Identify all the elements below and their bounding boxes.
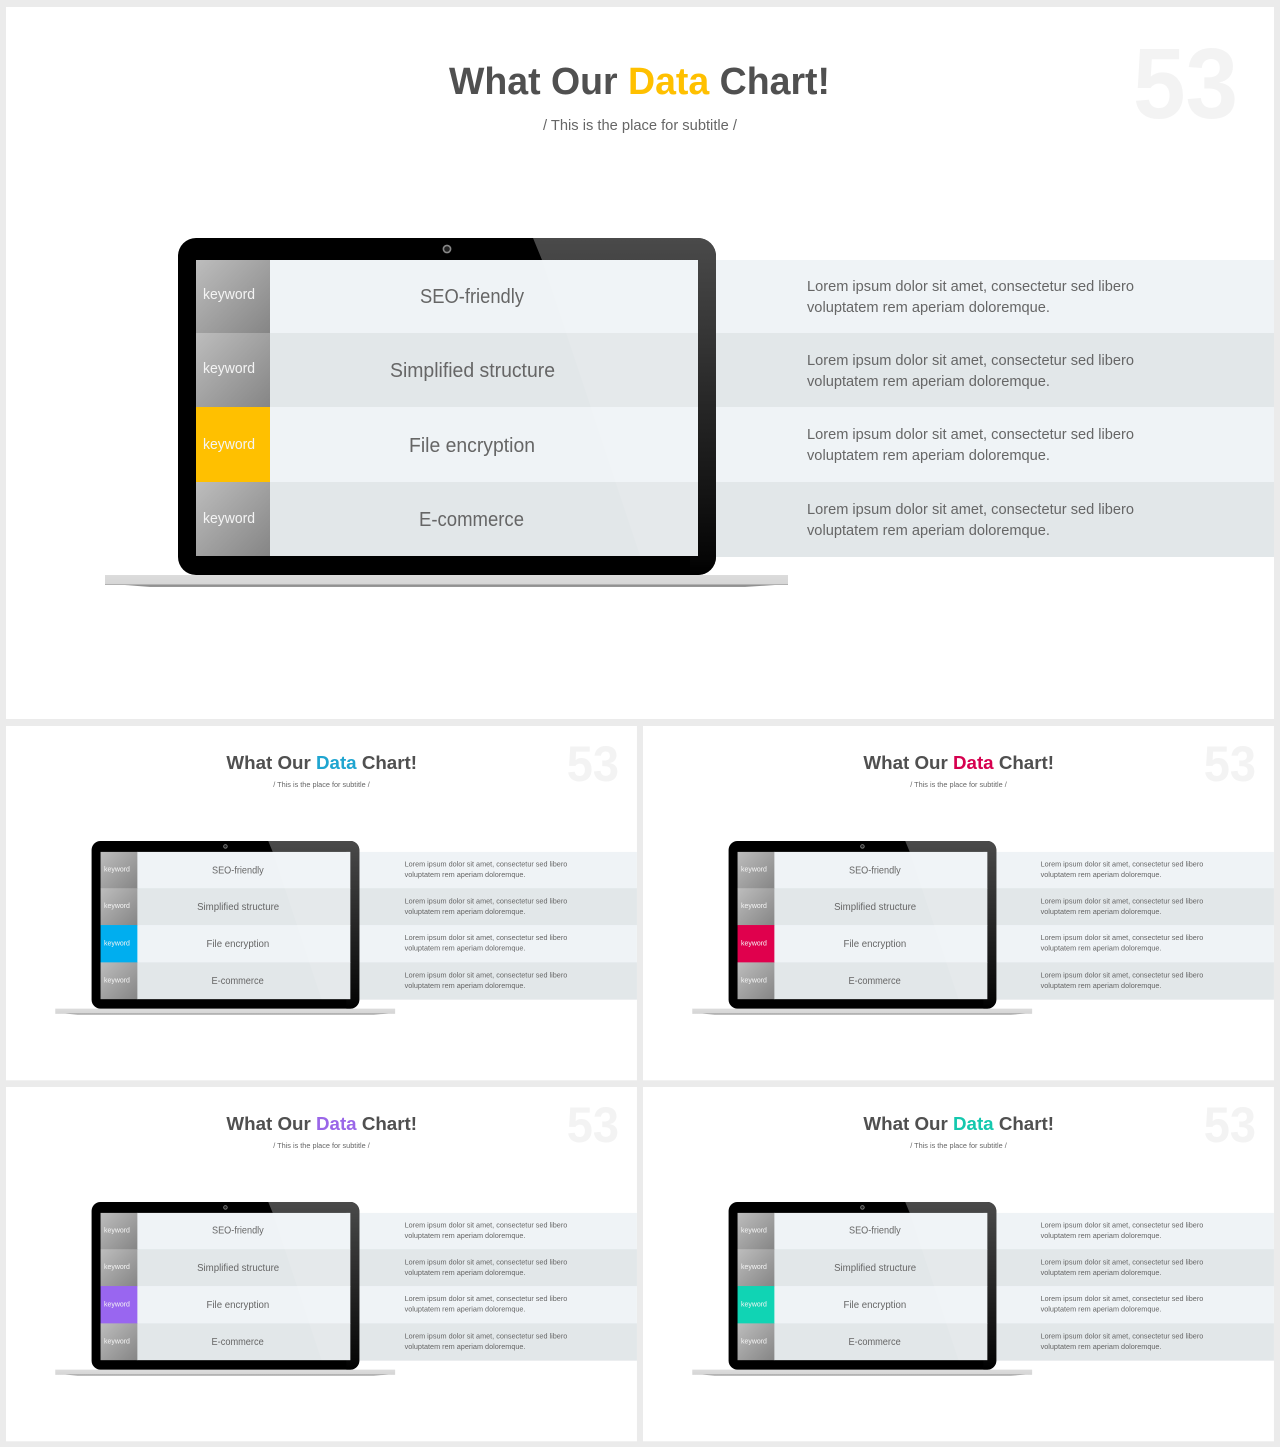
description bands	[716, 260, 1274, 557]
subtitle: / This is the place for subtitle /	[543, 117, 738, 134]
description bands: voluptatem rem aperiam doloremque.	[1041, 944, 1161, 953]
description bands: voluptatem rem aperiam doloremque.	[1041, 981, 1161, 990]
laptop with table: keyword	[741, 1225, 767, 1234]
laptop with table: SEO-friendly	[212, 1225, 264, 1236]
laptop with table: File encryption	[207, 1300, 269, 1311]
laptop with table: keyword	[741, 975, 767, 984]
description bands: voluptatem rem aperiam doloremque.	[405, 1305, 525, 1314]
laptop with table: File encryption	[844, 1300, 906, 1311]
description bands: Lorem ipsum dolor sit amet, consectetur sed libero	[807, 353, 1134, 369]
title: What Our Data Chart!	[863, 753, 1054, 774]
page number: 53	[567, 736, 619, 792]
description bands	[359, 1213, 637, 1361]
laptop with table: keyword	[104, 1262, 130, 1271]
title: What Our Data Chart!	[449, 61, 830, 103]
description bands: Lorem ipsum dolor sit amet, consectetur sed libero	[405, 1257, 567, 1266]
laptop with table: keyword	[741, 864, 767, 873]
description bands: Lorem ipsum dolor sit amet, consectetur sed libero	[405, 860, 567, 869]
description bands: Lorem ipsum dolor sit amet, consectetur sed libero	[807, 279, 1134, 295]
subtitle: / This is the place for subtitle /	[910, 1141, 1008, 1150]
laptop with table	[55, 841, 395, 1015]
laptop with table: keyword	[203, 360, 255, 377]
laptop with table: File encryption	[844, 939, 906, 950]
slide: yellow (large)	[6, 7, 1274, 719]
title: What Our Data Chart!	[226, 1114, 417, 1135]
subtitle: / This is the place for subtitle /	[273, 780, 371, 789]
description bands: voluptatem rem aperiam doloremque.	[1041, 907, 1161, 916]
description bands: Lorem ipsum dolor sit amet, consectetur sed libero	[1041, 1332, 1203, 1341]
description bands: Lorem ipsum dolor sit amet, consectetur sed libero	[1041, 1221, 1203, 1230]
laptop with table: Simplified structure	[834, 1263, 917, 1274]
description bands: Lorem ipsum dolor sit amet, consectetur sed libero	[1041, 896, 1203, 905]
page number: 53	[567, 1097, 619, 1153]
description bands: voluptatem rem aperiam doloremque.	[405, 944, 525, 953]
description bands: voluptatem rem aperiam doloremque.	[1041, 1342, 1161, 1351]
description bands: Lorem ipsum dolor sit amet, consectetur sed libero	[405, 1332, 567, 1341]
laptop with table: Simplified structure	[834, 902, 917, 913]
laptop with table: keyword	[741, 1299, 767, 1308]
laptop with table: keyword	[104, 938, 130, 947]
description bands: Lorem ipsum dolor sit amet, consectetur sed libero	[405, 971, 567, 980]
slide: purple	[6, 1087, 637, 1441]
laptop with table: keyword	[104, 864, 130, 873]
laptop with table: keyword	[104, 1299, 130, 1308]
description bands: Lorem ipsum dolor sit amet, consectetur sed libero	[1041, 933, 1203, 942]
laptop with table: keyword	[104, 975, 130, 984]
laptop with table: File encryption	[409, 435, 535, 457]
laptop with table: File encryption	[207, 939, 269, 950]
laptop with table: SEO-friendly	[849, 865, 901, 876]
laptop with table: Simplified structure	[197, 902, 280, 913]
title: What Our Data Chart!	[226, 753, 417, 774]
description bands: voluptatem rem aperiam doloremque.	[807, 374, 1050, 390]
laptop with table: SEO-friendly	[420, 286, 524, 308]
laptop with table	[692, 1202, 1032, 1376]
laptop with table: keyword	[741, 938, 767, 947]
description bands: Lorem ipsum dolor sit amet, consectetur sed libero	[1041, 1294, 1203, 1303]
description bands: Lorem ipsum dolor sit amet, consectetur sed libero	[405, 1294, 567, 1303]
description bands: voluptatem rem aperiam doloremque.	[807, 523, 1050, 539]
title: What Our Data Chart!	[863, 1114, 1054, 1135]
description bands: voluptatem rem aperiam doloremque.	[1041, 1268, 1161, 1277]
laptop with table: Simplified structure	[197, 1263, 280, 1274]
laptop with table	[55, 1202, 395, 1376]
description bands: Lorem ipsum dolor sit amet, consectetur sed libero	[405, 933, 567, 942]
page number: 53	[1204, 1097, 1256, 1153]
laptop with table: Simplified structure	[390, 360, 555, 382]
slide: teal	[643, 1087, 1274, 1441]
description bands: voluptatem rem aperiam doloremque.	[405, 907, 525, 916]
description bands: Lorem ipsum dolor sit amet, consectetur sed libero	[405, 1221, 567, 1230]
laptop with table: E-commerce	[419, 509, 524, 531]
slide: blue	[6, 726, 637, 1080]
description bands	[996, 852, 1274, 1000]
laptop with table: keyword	[104, 1225, 130, 1234]
laptop with table: keyword	[104, 1336, 130, 1345]
laptop with table: E-commerce	[849, 1337, 901, 1348]
description bands: voluptatem rem aperiam doloremque.	[405, 981, 525, 990]
description bands: voluptatem rem aperiam doloremque.	[405, 870, 525, 879]
subtitle: / This is the place for subtitle /	[910, 780, 1008, 789]
laptop with table: E-commerce	[212, 976, 264, 987]
description bands	[996, 1213, 1274, 1361]
description bands: Lorem ipsum dolor sit amet, consectetur sed libero	[807, 427, 1134, 443]
description bands: voluptatem rem aperiam doloremque.	[405, 1268, 525, 1277]
laptop with table: keyword	[203, 286, 255, 303]
description bands: voluptatem rem aperiam doloremque.	[405, 1231, 525, 1240]
description bands: voluptatem rem aperiam doloremque.	[807, 300, 1050, 316]
description bands: Lorem ipsum dolor sit amet, consectetur sed libero	[807, 502, 1134, 518]
description bands: voluptatem rem aperiam doloremque.	[1041, 870, 1161, 879]
description bands: voluptatem rem aperiam doloremque.	[405, 1342, 525, 1351]
description bands: Lorem ipsum dolor sit amet, consectetur sed libero	[1041, 860, 1203, 869]
laptop with table: keyword	[741, 901, 767, 910]
subtitle: / This is the place for subtitle /	[273, 1141, 371, 1150]
description bands: voluptatem rem aperiam doloremque.	[1041, 1305, 1161, 1314]
laptop with table: keyword	[741, 1262, 767, 1271]
laptop with table	[105, 238, 788, 587]
page number: 53	[1204, 736, 1256, 792]
description bands: Lorem ipsum dolor sit amet, consectetur sed libero	[1041, 1257, 1203, 1266]
laptop with table: E-commerce	[212, 1337, 264, 1348]
laptop with table: keyword	[741, 1336, 767, 1345]
laptop with table	[692, 841, 1032, 1015]
description bands: Lorem ipsum dolor sit amet, consectetur sed libero	[405, 896, 567, 905]
laptop with table: E-commerce	[849, 976, 901, 987]
slide: crimson	[643, 726, 1274, 1080]
description bands: Lorem ipsum dolor sit amet, consectetur sed libero	[1041, 971, 1203, 980]
laptop with table: keyword	[203, 510, 255, 527]
laptop with table: keyword	[203, 436, 255, 453]
laptop with table: SEO-friendly	[849, 1225, 901, 1236]
page number: 53	[1133, 28, 1238, 140]
description bands	[359, 852, 637, 1000]
laptop with table: keyword	[104, 901, 130, 910]
description bands: voluptatem rem aperiam doloremque.	[807, 448, 1050, 464]
laptop with table: SEO-friendly	[212, 865, 264, 876]
description bands: voluptatem rem aperiam doloremque.	[1041, 1231, 1161, 1240]
